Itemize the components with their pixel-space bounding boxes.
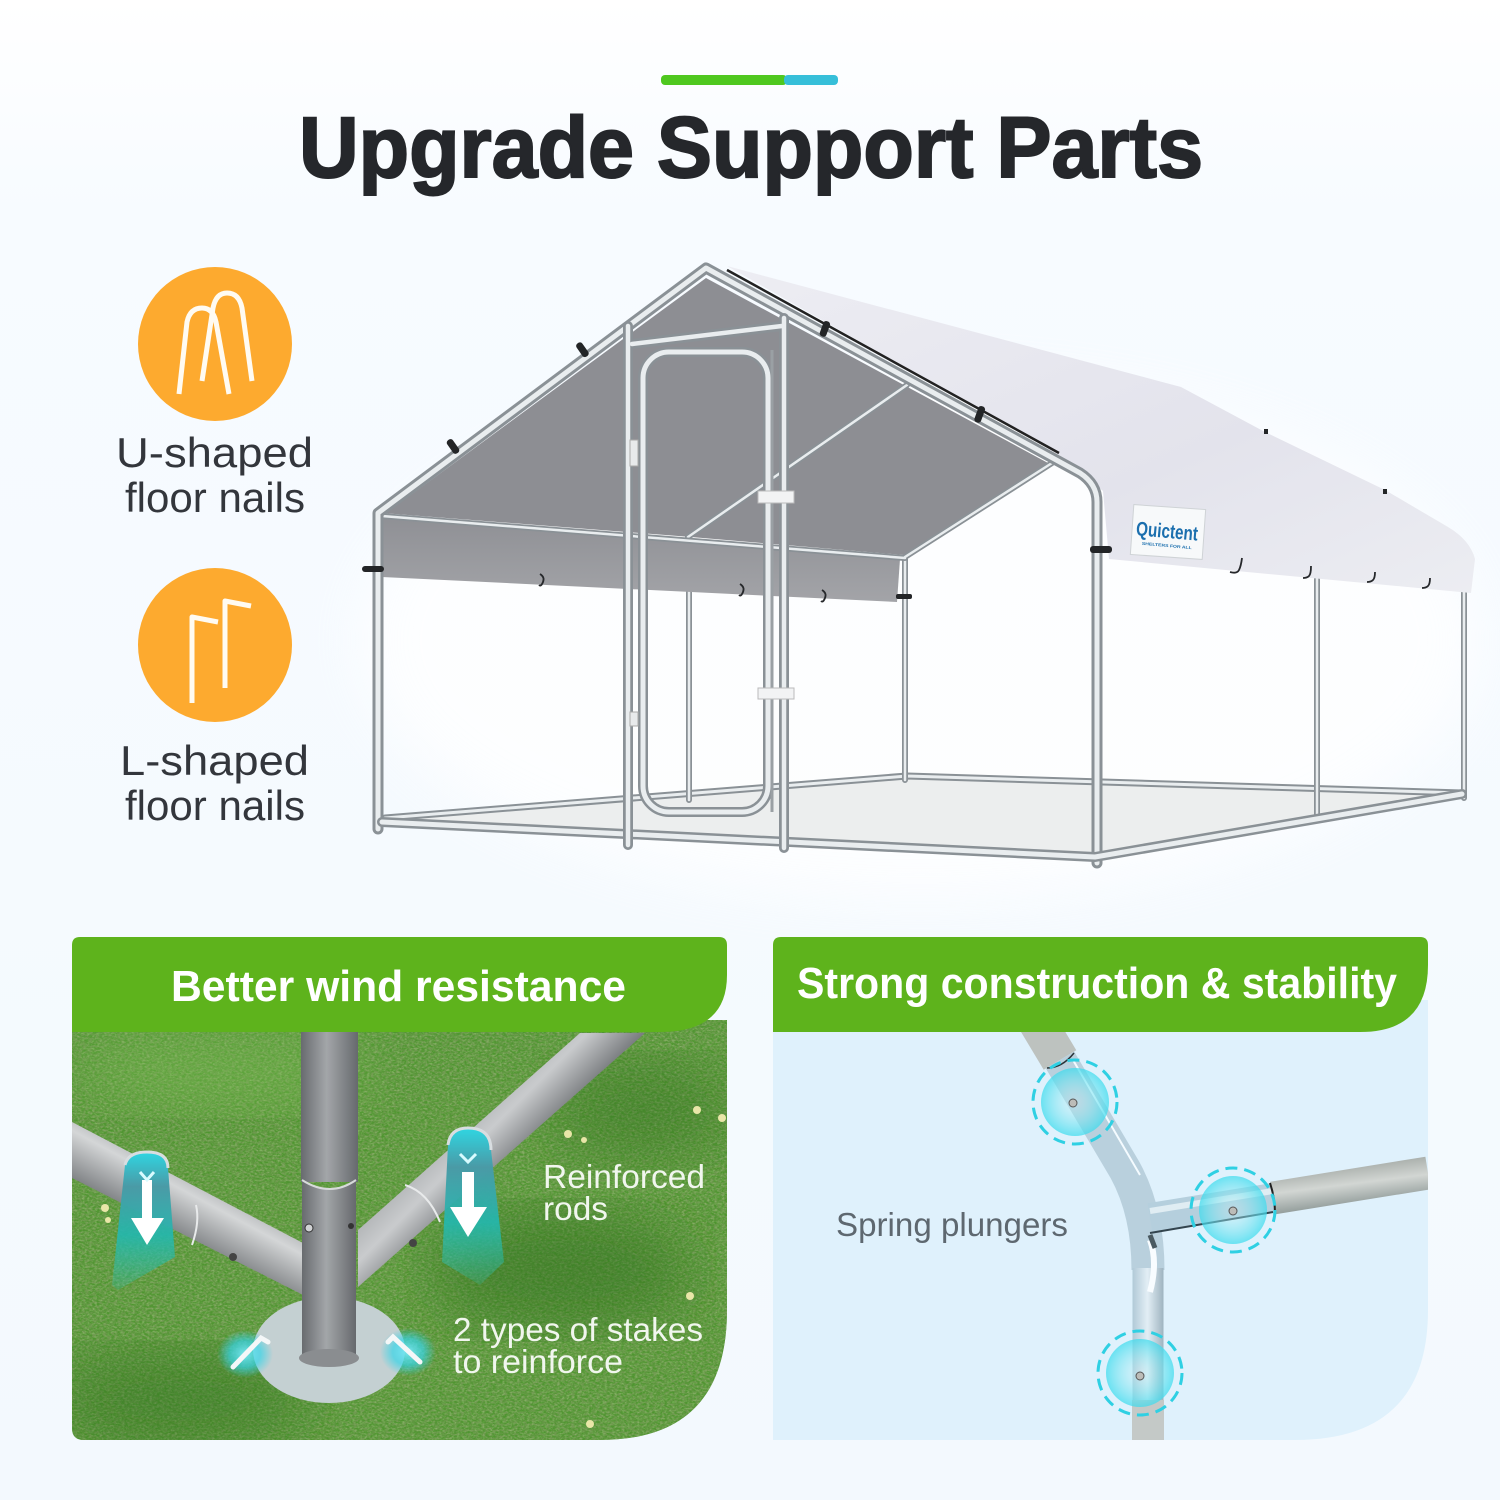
header: strong construction and stability: Strong construction & stability: [797, 959, 1397, 1008]
base plate: [253, 1297, 405, 1403]
label: U-shaped floor nails: [116, 429, 313, 521]
label: L-shaped floor nails: [120, 737, 309, 829]
caption: stakes: [453, 1311, 703, 1380]
title: Upgrade Support Parts: [299, 100, 1203, 196]
floor: [390, 778, 1455, 853]
label: U-shaped floor nails: floor nails: [125, 474, 305, 521]
canopy top: [727, 266, 1475, 593]
header: better wind resistance: [72, 937, 727, 1032]
tube joint: [1036, 1020, 1428, 1440]
plunger highlights: [1033, 1060, 1275, 1415]
icon: L-shaped nail: [138, 568, 292, 722]
stake glow: [217, 1328, 436, 1378]
clips and hooks: [362, 320, 1430, 602]
grass photo: [50, 1020, 730, 1450]
back and rear frame: [385, 539, 1464, 820]
feature: L-shaped floor nails: [120, 568, 309, 829]
flowers: [101, 1106, 726, 1428]
brand label: [1130, 505, 1206, 559]
label: L-shaped floor nails: L-shaped: [120, 737, 309, 784]
door frame: [628, 318, 794, 848]
brand label: Quictent: [1135, 518, 1199, 546]
caption: reinforced rods: [543, 1158, 705, 1227]
caption: stakes: 2 types of stakes: [453, 1311, 703, 1348]
product: tent: [360, 266, 1480, 900]
panel: strong construction and stability: [773, 937, 1428, 1440]
arrow callout right: [442, 1128, 504, 1285]
stakes: [233, 1337, 420, 1367]
caption: spring plungers: Spring plungers: [836, 1206, 1068, 1243]
brand label: SHELTERS FOR ALL: [1142, 541, 1193, 550]
accent bar: [661, 75, 838, 85]
icon: U-shaped nail: [138, 267, 292, 421]
panel background: [773, 1000, 1428, 1440]
feature: U-shaped floor nails: [116, 267, 313, 521]
caption: stakes: to reinforce: [453, 1343, 623, 1380]
header: better wind resistance: Better wind resistance: [171, 962, 626, 1011]
panel: better wind resistance: [50, 937, 730, 1450]
caption: reinforced rods: Reinforced: [543, 1158, 705, 1195]
label: U-shaped floor nails: U-shaped: [116, 429, 313, 476]
arrow callout left: [112, 1152, 175, 1290]
front gable frame: [378, 268, 1097, 863]
caption: reinforced rods: rods: [543, 1190, 608, 1227]
vertical pole: [299, 1032, 359, 1367]
reinforced rods: [72, 1033, 645, 1295]
canopy underside: [382, 278, 1052, 602]
label: L-shaped floor nails: floor nails: [125, 782, 305, 829]
header: strong construction and stability: [773, 937, 1428, 1032]
front floor rods: [382, 794, 1462, 857]
